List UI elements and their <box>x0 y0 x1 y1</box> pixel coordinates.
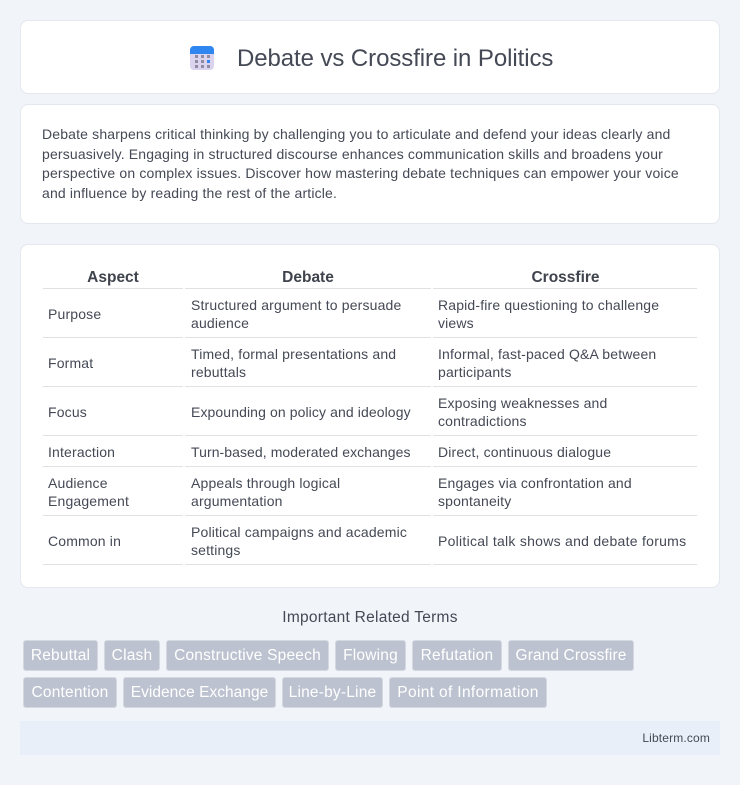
title: Debate vs Crossfire in Politics <box>237 45 553 72</box>
column headers: Debate <box>282 269 334 286</box>
related terms heading: Important Related Terms <box>282 609 458 626</box>
row: common in: Common in <box>48 533 121 549</box>
related terms tags: Rebuttal <box>31 647 90 664</box>
row: audience engagement: Engagement <box>48 493 129 509</box>
comparison table: views <box>438 315 474 331</box>
comparison table: contradictions <box>438 413 527 429</box>
related terms tags: Flowing <box>343 647 398 664</box>
column headers <box>87 269 600 286</box>
footer credit: Libterm.com <box>642 731 710 745</box>
comparison table: Appeals through logical <box>191 475 340 491</box>
intro paragraph: perspective on complex issues. Discover how mastering debate techniques can empower your voice <box>42 165 679 181</box>
icon: calendar <box>190 46 214 70</box>
intro paragraph: persuasively. Engaging in structured discourse enhances communication skills and broadens your <box>42 146 663 162</box>
related terms tags: Evidence Exchange <box>131 684 268 701</box>
row: focus: Focus <box>48 404 87 420</box>
related terms tags: Clash <box>112 647 152 664</box>
comparison table: Rapid-fire questioning to challenge <box>438 297 659 313</box>
comparison table: Direct, continuous dialogue <box>438 444 611 460</box>
header panel <box>20 20 720 94</box>
related terms tags: Contention <box>32 684 108 701</box>
comparison table: Informal, fast-paced Q&A between <box>438 346 656 362</box>
row: format: Format <box>48 355 93 371</box>
comparison table: argumentation <box>191 493 283 509</box>
row: interaction: Interaction <box>48 444 115 460</box>
related terms tags: Constructive Speech <box>174 647 321 664</box>
related terms tags: Refutation <box>421 647 493 664</box>
comparison table: Political campaigns and academic <box>191 524 407 540</box>
row: purpose: Purpose <box>48 306 101 322</box>
comparison table: settings <box>191 542 241 558</box>
related terms tags: Point of Information <box>397 684 539 701</box>
intro paragraph <box>42 126 679 201</box>
intro paragraph: and influence by reading the rest of the article. <box>42 184 337 200</box>
intro paragraph: Debate sharpens critical thinking by challenging you to articulate and defend your ideas clearly and <box>42 126 670 142</box>
comparison table: Exposing weaknesses and <box>438 395 607 411</box>
comparison table: Expounding on policy and ideology <box>191 404 411 420</box>
comparison table panel <box>20 244 720 588</box>
comparison table: Structured argument to persuade <box>191 297 401 313</box>
intro text panel <box>20 104 720 224</box>
column headers: Crossfire <box>531 269 600 286</box>
comparison table: participants <box>438 364 512 380</box>
comparison table: Engages via confrontation and <box>438 475 632 491</box>
comparison table: spontaneity <box>438 493 511 509</box>
row: audience engagement <box>48 475 129 509</box>
comparison table: Turn-based, moderated exchanges <box>191 444 411 460</box>
footer bar <box>20 721 720 755</box>
comparison table <box>43 269 697 565</box>
column headers: Aspect <box>87 269 139 286</box>
row: audience engagement: Audience <box>48 475 108 491</box>
related terms tags <box>23 640 634 708</box>
related terms tags: Line-by-Line <box>289 684 376 701</box>
comparison table: rebuttals <box>191 364 246 380</box>
related terms tags: Grand Crossfire <box>516 647 626 664</box>
comparison table: audience <box>191 315 249 331</box>
comparison table: Timed, formal presentations and <box>191 346 396 362</box>
comparison table: Political talk shows and debate forums <box>438 533 686 549</box>
